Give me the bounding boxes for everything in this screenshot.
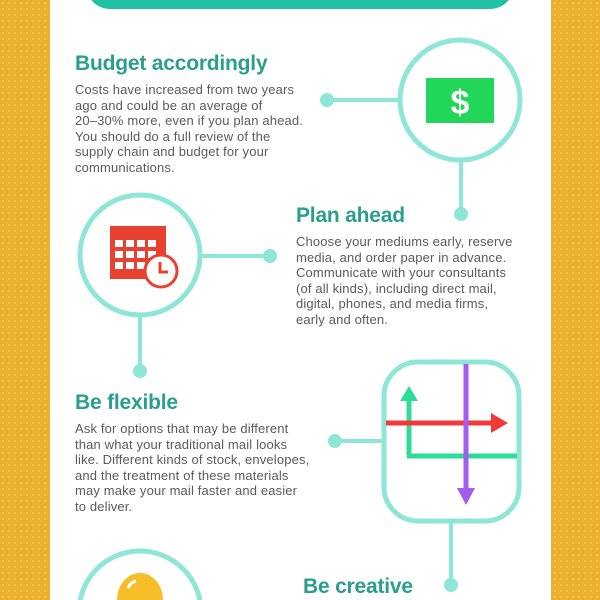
text: flexible: and the treatment of these materials	[75, 468, 289, 483]
icon: calendar circle	[80, 195, 200, 315]
text: budget: Costs have increased from two years	[75, 82, 294, 97]
text: plan: Communicate with your consultants	[296, 265, 506, 280]
text: budget: You should do a full review of the	[75, 129, 270, 144]
text: plan: (of all kinds), including direct mail,	[296, 281, 497, 296]
text: flexible: to deliver.	[75, 499, 132, 514]
heading: budget: Budget accordingly	[75, 52, 267, 75]
text: flexible	[75, 421, 309, 514]
connector: flexible	[330, 436, 456, 590]
icon: dollar circle	[400, 40, 520, 160]
heading: plan: Plan ahead	[296, 204, 405, 227]
text: budget	[75, 82, 303, 175]
text: flexible: may make your mail faster and easier	[75, 483, 297, 498]
text: flexible: like. Different kinds of stock, envelopes,	[75, 452, 309, 467]
text: flexible: Ask for options that may be different	[75, 421, 288, 436]
text: plan	[296, 234, 513, 327]
connector: budget	[322, 95, 466, 219]
icon: bulb circle	[79, 551, 201, 600]
icon: arrows box	[384, 362, 519, 521]
header bar	[86, 0, 514, 9]
text: flexible: than what your traditional mail looks	[75, 437, 287, 452]
heading: flexible: Be flexible	[75, 391, 178, 414]
heading: creative: Be creative	[303, 575, 413, 598]
icon: dollar circle: $	[451, 84, 470, 122]
connector: plan	[135, 251, 275, 376]
text: budget: supply chain and budget for your	[75, 144, 268, 159]
text: plan: early and often.	[296, 312, 388, 327]
text: plan: media, and order paper in advance.	[296, 250, 506, 265]
text: plan: digital, phones, and media firms,	[296, 296, 488, 311]
text: plan: Choose your mediums early, reserve	[296, 234, 513, 249]
text: budget: communications.	[75, 160, 175, 175]
text: budget: 20–30% more, even if you plan ahead.	[75, 113, 303, 128]
text: budget: ago and could be an average of	[75, 98, 262, 113]
